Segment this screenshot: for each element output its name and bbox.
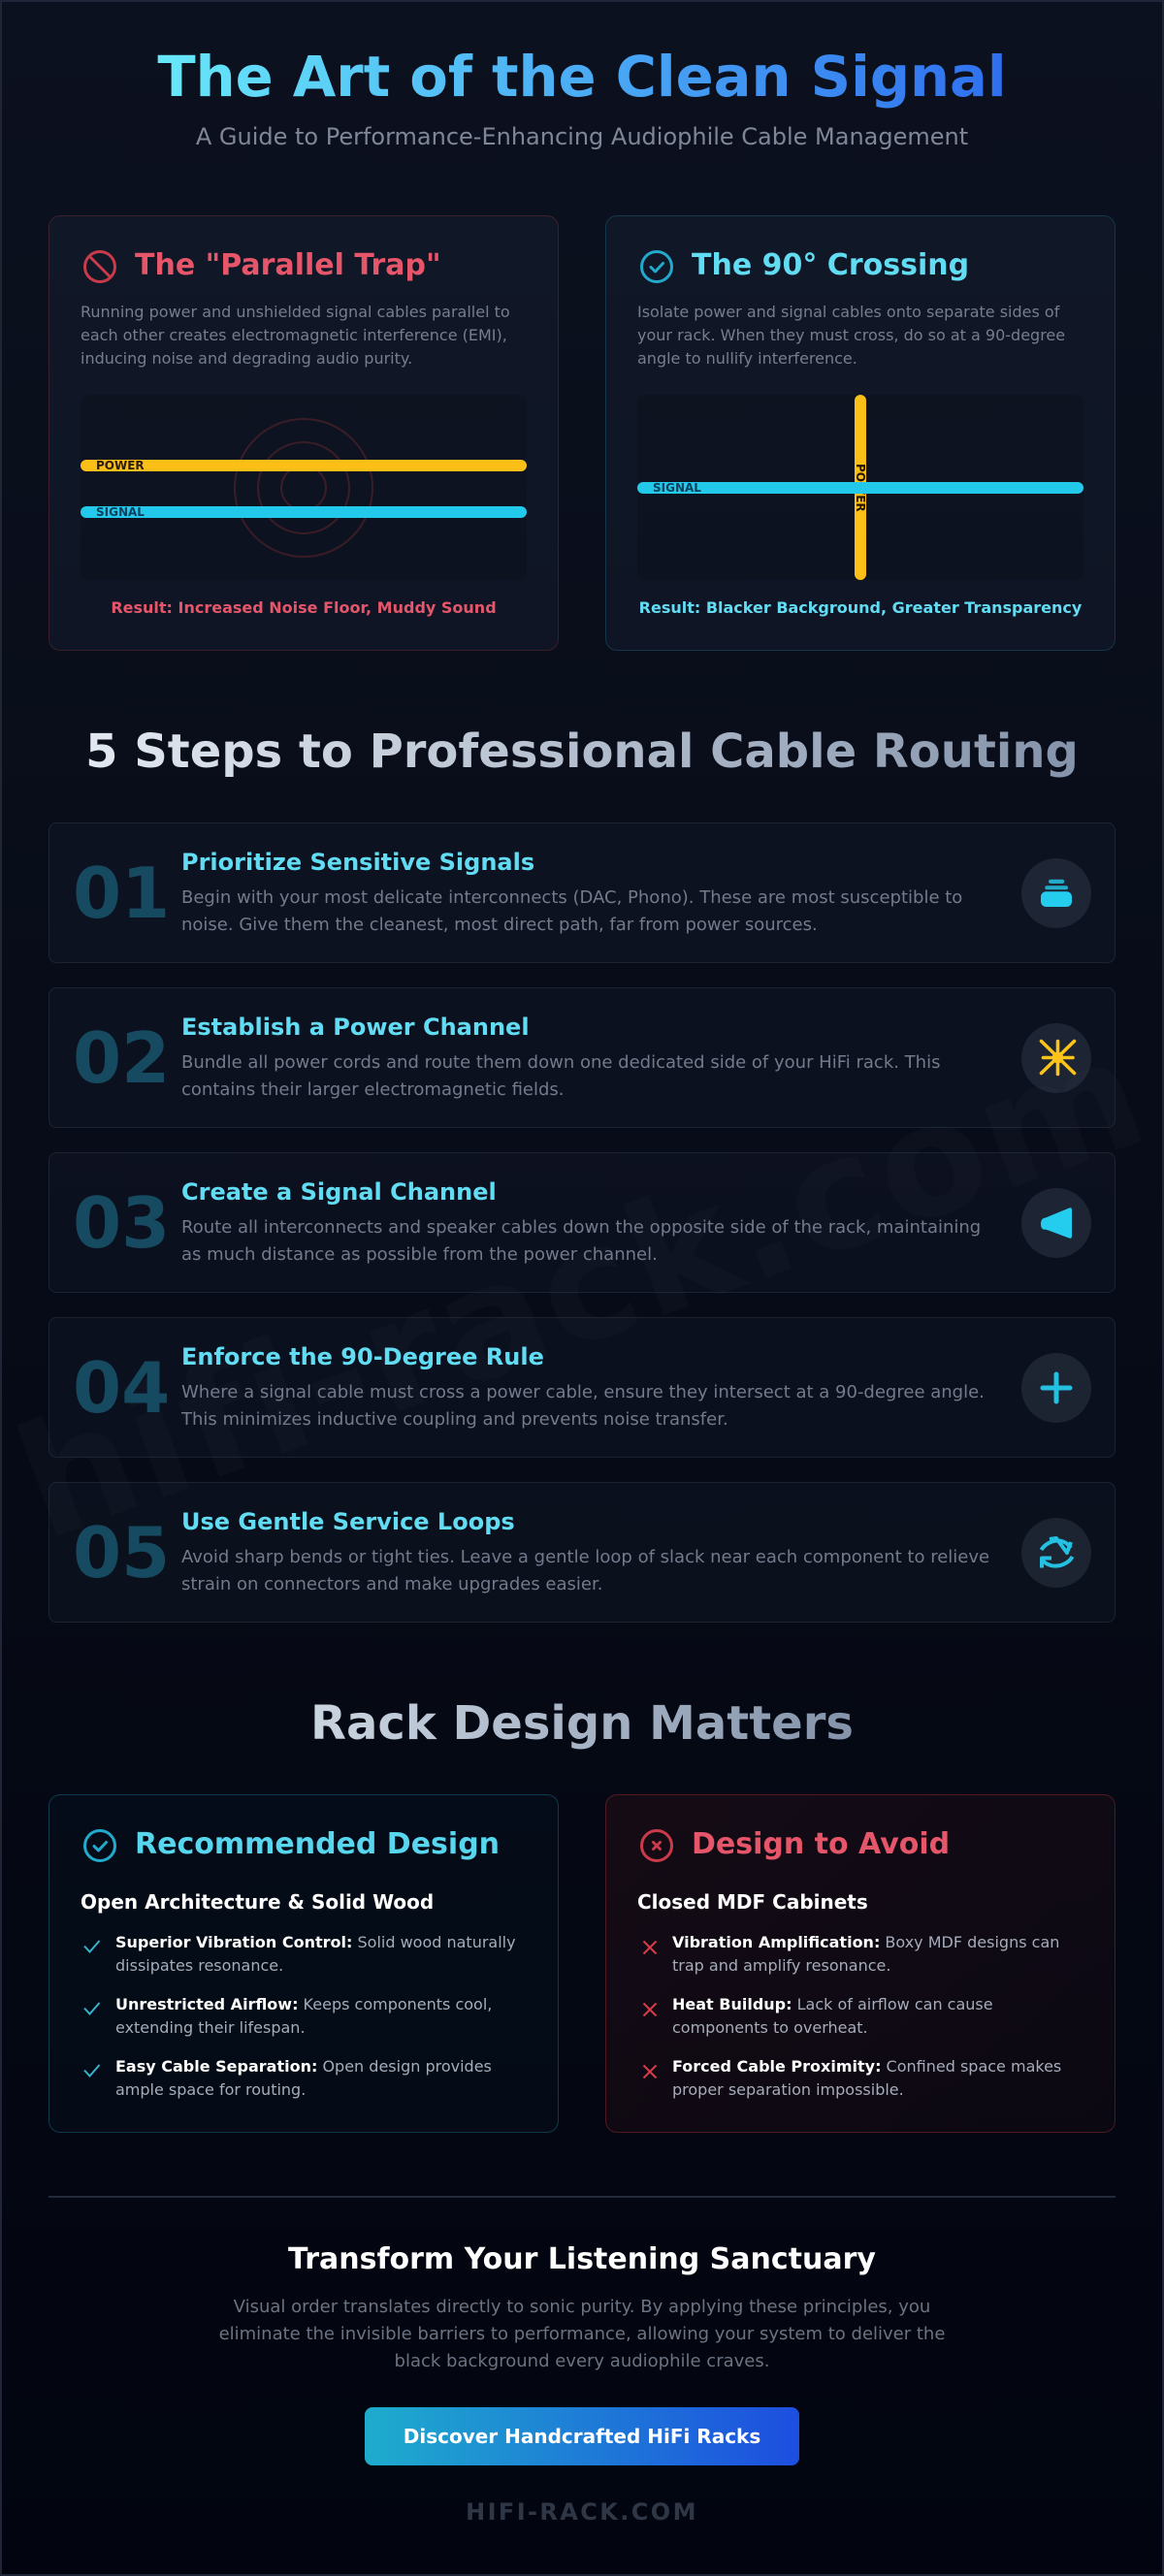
- icon: power burst: [1021, 1023, 1091, 1093]
- signal cable: [81, 506, 527, 518]
- number 05: 05: [73, 1512, 170, 1594]
- number 04: 04: [73, 1347, 170, 1429]
- icon: cross: [642, 2002, 658, 2017]
- benefit text: [115, 1933, 516, 1975]
- closing text: eliminate the invisible barriers to performance, allowing your system to deliver the: [219, 2324, 945, 2344]
- number 01: 01: [73, 853, 170, 934]
- number 03: 03: [73, 1182, 170, 1264]
- step description: noise. Give them the cleanest, most direct path, far from power sources.: [181, 915, 818, 935]
- drawback 1: [642, 1933, 1059, 1975]
- drawback text: Vibration Amplification: Boxy MDF designs can: [672, 1933, 1059, 1951]
- heading: crossing: The 90° Crossing: [692, 248, 969, 282]
- benefit text: [115, 2057, 492, 2099]
- drawback text: Heat Buildup: Lack of airflow can cause: [672, 1995, 993, 2013]
- closing text: black background every audiophile craves.: [395, 2351, 769, 2371]
- drawback text: [672, 1933, 1059, 1975]
- drawback text: [672, 2057, 1061, 2099]
- drawback 3: [642, 2057, 1061, 2099]
- closing text: [219, 2297, 945, 2371]
- drawback text: components to overheat.: [672, 2018, 868, 2037]
- text: crossing description: Isolate power and signal cables onto separate sides of: [637, 303, 1059, 321]
- power cable vertical: POWER: [854, 464, 867, 512]
- icon: check: [83, 2064, 101, 2077]
- step description: as much distance as possible from the power channel.: [181, 1244, 658, 1265]
- closing heading: Transform Your Listening Sanctuary: [288, 2242, 876, 2276]
- panel: the 90 degree crossing: [605, 215, 1116, 651]
- step description: [181, 1052, 940, 1100]
- icon: loop arrows: [1021, 1518, 1091, 1588]
- subheading: open architecture: Open Architecture & Solid Wood: [81, 1890, 434, 1914]
- diagram: crossing cables: [637, 395, 1083, 580]
- diagram: parallel cables: [81, 395, 527, 580]
- icon: check: [83, 2002, 101, 2015]
- step 3: [48, 1152, 1116, 1293]
- text: parallel trap description: Running power and unshielded signal cables parallel to: [81, 303, 510, 321]
- watermark: hifi-rack.com: [0, 1000, 1164, 1575]
- text: parallel trap description: each other creates electromagnetic interference (EMI),: [81, 326, 507, 344]
- heading: avoid: Design to Avoid: [692, 1827, 950, 1861]
- benefit 2: [83, 1995, 492, 2037]
- step description: [181, 887, 962, 935]
- step description: Bundle all power cords and route them down one dedicated side of your HiFi rack. This: [181, 1052, 940, 1073]
- text: crossing description: angle to nullify interference.: [637, 349, 857, 368]
- title: The Art of the Clean Signal: [157, 45, 1007, 110]
- footer brand: HIFI-RACK.COM: [466, 2498, 698, 2526]
- step 2: [48, 987, 1116, 1128]
- benefit text: extending their lifespan.: [115, 2018, 306, 2037]
- signal cable horizontal: [637, 482, 1083, 494]
- subheading: closed mdf: Closed MDF Cabinets: [637, 1890, 868, 1914]
- step description: Begin with your most delicate interconnects (DAC, Phono). These are most susceptible to: [181, 887, 962, 908]
- icon: check circle: [640, 250, 673, 283]
- icon: prohibited: [83, 250, 116, 283]
- panel: the parallel trap: [48, 215, 559, 651]
- step title: Establish a Power Channel: [181, 1014, 530, 1041]
- text: crossing description: your rack. When they must cross, do so at a 90-degree: [637, 326, 1065, 344]
- drawback text: proper separation impossible.: [672, 2080, 904, 2099]
- benefit 3: [83, 2057, 492, 2099]
- drawback text: trap and amplify resonance.: [672, 1956, 890, 1975]
- step 5: [48, 1482, 1116, 1623]
- step title: Prioritize Sensitive Signals: [181, 849, 534, 876]
- step description: strain on connectors and make upgrades easier.: [181, 1574, 602, 1594]
- icon: x circle: [640, 1829, 673, 1862]
- text: crossing description: [637, 303, 1065, 368]
- icon: cross: [642, 1940, 658, 1955]
- icon: check: [83, 1940, 101, 1953]
- result: parallel: Result: Increased Noise Floor, Muddy Sound: [111, 598, 497, 617]
- heading: rack design matters: Rack Design Matters: [310, 1696, 854, 1751]
- panel: recommended design: [48, 1794, 559, 2133]
- step description: [181, 1547, 989, 1594]
- icon: cross: [642, 2064, 658, 2079]
- signal cable horizontal: SIGNAL: [653, 481, 701, 495]
- step description: Avoid sharp bends or tight ties. Leave a gentle loop of slack near each component to relieve: [181, 1547, 989, 1567]
- text: parallel trap description: inducing noise and degrading audio purity.: [81, 349, 412, 368]
- drawback text: Forced Cable Proximity: Confined space makes: [672, 2057, 1061, 2076]
- benefit text: dissipates resonance.: [115, 1956, 283, 1975]
- step description: Route all interconnects and speaker cables down the opposite side of the rack, maintaining: [181, 1217, 981, 1238]
- step description: contains their larger electromagnetic fields.: [181, 1079, 565, 1100]
- power cable: [81, 460, 527, 471]
- icon: speaker: [1021, 1188, 1091, 1258]
- step description: Where a signal cable must cross a power cable, ensure they intersect at a 90-degree angle.: [181, 1382, 985, 1402]
- heading: parallel trap: The "Parallel Trap": [135, 248, 441, 282]
- number 02: 02: [73, 1017, 170, 1099]
- step title: Use Gentle Service Loops: [181, 1508, 515, 1535]
- panel: design to avoid: [605, 1794, 1116, 2133]
- text: parallel trap description: [81, 303, 510, 368]
- benefit text: Easy Cable Separation: Open design provides: [115, 2057, 492, 2076]
- result: crossing: Result: Blacker Background, Greater Transparency: [639, 598, 1082, 617]
- step description: [181, 1217, 981, 1265]
- icon: stacked components: [1021, 858, 1091, 928]
- step description: [180, 1382, 985, 1430]
- heading: recommended: Recommended Design: [135, 1827, 500, 1861]
- icon: check circle: [83, 1829, 116, 1862]
- benefit 1: [83, 1933, 516, 1975]
- closing text: Visual order translates directly to sonic purity. By applying these principles, you: [234, 2297, 930, 2317]
- icon: plus crossing: [1021, 1353, 1091, 1423]
- power cable vertical: [855, 395, 866, 580]
- step 1: [48, 822, 1116, 963]
- step title: Enforce the 90-Degree Rule: [181, 1343, 544, 1370]
- benefit text: Superior Vibration Control: Solid wood naturally: [115, 1933, 516, 1951]
- benefit text: Unrestricted Airflow: Keeps components cool,: [115, 1995, 492, 2013]
- step title: Create a Signal Channel: [181, 1178, 497, 1206]
- power cable: POWER: [96, 459, 145, 472]
- step description: This minimizes inductive coupling and prevents noise transfer.: [181, 1409, 728, 1430]
- benefit text: ample space for routing.: [115, 2080, 306, 2099]
- subtitle: A Guide to Performance-Enhancing Audiophile Cable Management: [196, 123, 968, 150]
- drawback text: [672, 1995, 993, 2037]
- drawback 2: [642, 1995, 993, 2037]
- benefit text: [115, 1995, 492, 2037]
- call to action button: Discover Handcrafted HiFi Racks: [404, 2425, 760, 2448]
- step 4: [48, 1317, 1116, 1458]
- signal cable: SIGNAL: [96, 505, 145, 519]
- call to action button: [365, 2407, 799, 2465]
- interference rings: [234, 418, 373, 558]
- heading: five steps: 5 Steps to Professional Cable Routing: [85, 724, 1079, 779]
